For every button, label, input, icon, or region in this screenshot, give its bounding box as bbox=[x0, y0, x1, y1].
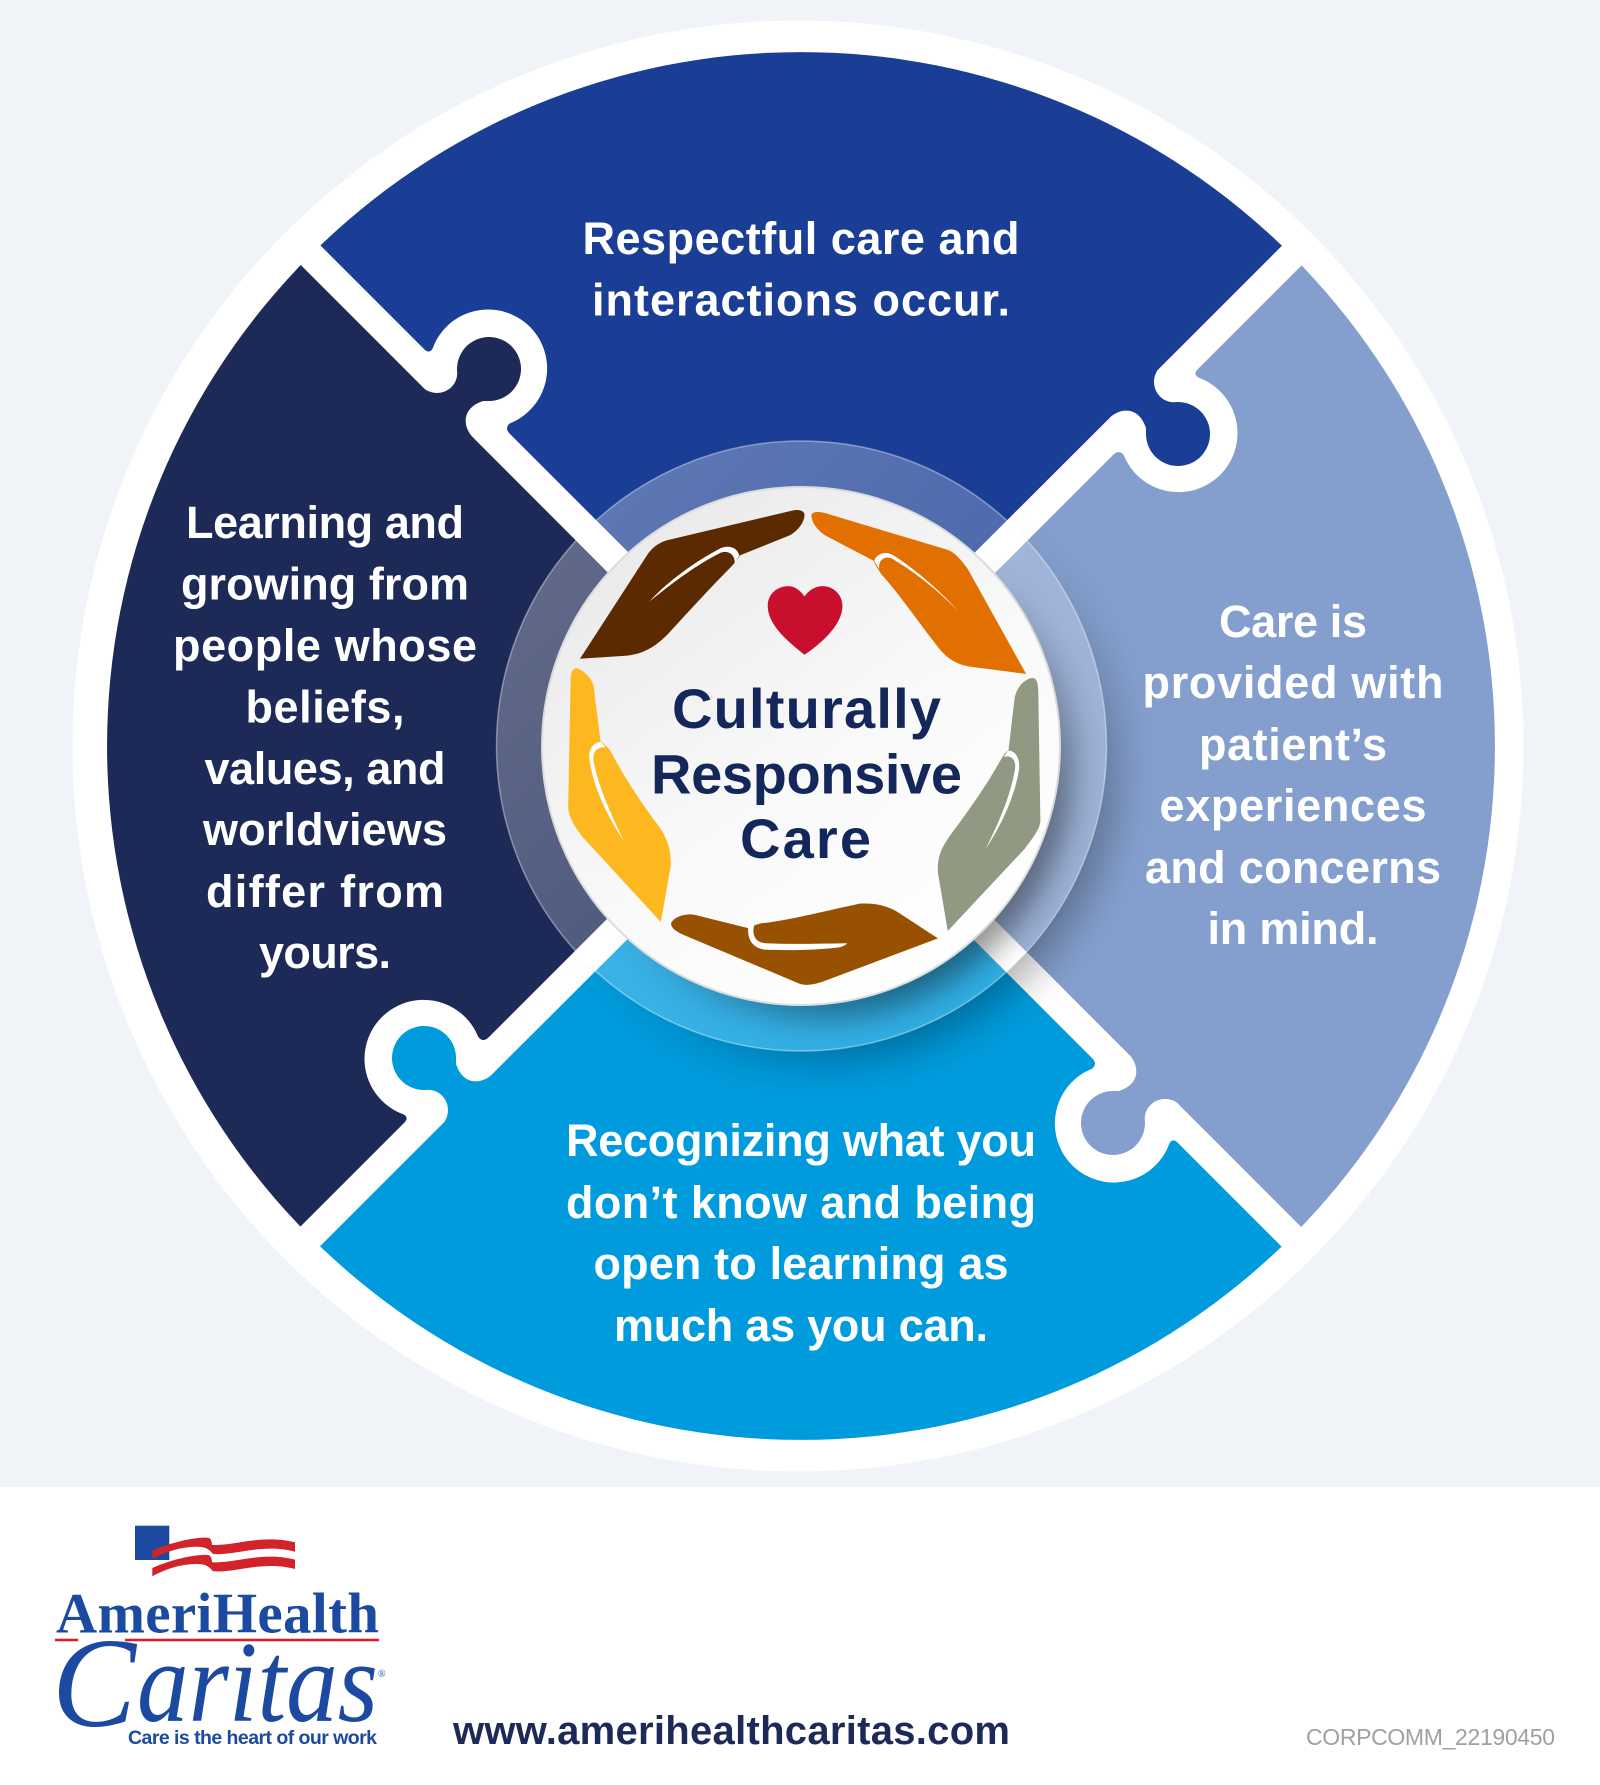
central hub bbox=[542, 487, 1060, 1005]
white seam: top-left bbox=[291, 236, 811, 756]
hand: brown bbox=[671, 904, 938, 985]
hub title: Responsive bbox=[651, 742, 962, 806]
puzzle knob: left piece bbox=[439, 327, 531, 424]
text: top piece: Respectful care and bbox=[582, 213, 1020, 264]
text: bottom piece: don’t know and being bbox=[566, 1177, 1036, 1228]
glass ring shadow bbox=[629, 576, 1138, 1082]
hub title: Care bbox=[740, 807, 871, 870]
puzzle piece: top bbox=[310, 52, 1292, 746]
text: right piece: in mind. bbox=[1208, 903, 1378, 954]
puzzle knob: top piece bbox=[1123, 384, 1220, 476]
puzzle knob: bottom piece bbox=[382, 1016, 479, 1108]
logo flag bbox=[135, 1526, 295, 1576]
white seam: top-right bbox=[791, 236, 1311, 756]
outer white ring bbox=[72, 20, 1524, 1472]
website url: www.amerihealthcaritas.com bbox=[452, 1709, 1010, 1753]
hub shadow bbox=[558, 503, 1074, 1019]
text: left piece: differ from bbox=[206, 866, 444, 917]
text: left piece bbox=[173, 497, 477, 978]
text: bottom piece bbox=[566, 1115, 1036, 1351]
text: right piece: provided with bbox=[1142, 657, 1444, 708]
text: left piece: worldviews bbox=[202, 804, 447, 855]
puzzle knob: right piece bbox=[1071, 1068, 1163, 1165]
text: left piece: Learning and bbox=[186, 497, 464, 548]
white seam: bottom-left bbox=[291, 736, 811, 1256]
hand: sage bbox=[938, 678, 1040, 931]
document code: CORPCOMM_22190450 bbox=[1306, 1724, 1555, 1750]
text: right piece: patient’s bbox=[1199, 719, 1387, 770]
logo tagline: Care is the heart of our work bbox=[128, 1727, 377, 1749]
white seam: bottom-right bbox=[791, 736, 1311, 1256]
logo wordmark: AmeriHealth: AmeriHealth bbox=[56, 1583, 379, 1646]
text: right piece bbox=[1142, 596, 1444, 954]
glass ring bbox=[496, 441, 1106, 1051]
hands illustration bbox=[568, 510, 1040, 985]
hand: orange bbox=[811, 512, 1026, 674]
text: bottom piece: open to learning as bbox=[594, 1238, 1008, 1289]
text: left piece: yours. bbox=[259, 927, 391, 978]
puzzle piece: left bbox=[107, 255, 801, 1237]
text: bottom piece: much as you can. bbox=[614, 1300, 988, 1351]
text: left piece: people whose bbox=[173, 620, 477, 671]
logo wordmark: Caritas: C bbox=[52, 1612, 138, 1754]
hand: yellow bbox=[568, 668, 671, 922]
puzzle piece: bottom bbox=[310, 746, 1292, 1440]
icon: heart bbox=[768, 586, 842, 655]
logo wordmark: Caritas: aritas bbox=[137, 1619, 378, 1747]
text: left piece: values, and bbox=[204, 743, 446, 794]
text: bottom piece: Recognizing what you bbox=[566, 1115, 1036, 1166]
text: top piece: interactions occur. bbox=[592, 274, 1010, 326]
logo wordmark: Caritas: ® bbox=[378, 1669, 386, 1680]
puzzle piece: right bbox=[801, 255, 1495, 1237]
hub title bbox=[651, 677, 962, 870]
text: top piece bbox=[582, 213, 1020, 326]
text: right piece: and concerns bbox=[1145, 842, 1441, 893]
text: right piece: experiences bbox=[1160, 780, 1426, 831]
puzzle circle bbox=[107, 52, 1495, 1440]
text: left piece: growing from bbox=[181, 558, 469, 610]
text: left piece: beliefs, bbox=[246, 682, 404, 732]
hand: dark brown bbox=[580, 510, 804, 659]
logo: AmeriHealth Caritas bbox=[52, 1526, 386, 1754]
hub title: Culturally bbox=[672, 677, 941, 740]
text: right piece: Care is bbox=[1219, 596, 1367, 647]
logo wordmark: Caritas bbox=[52, 1612, 386, 1754]
logo red rule bbox=[55, 1639, 379, 1641]
